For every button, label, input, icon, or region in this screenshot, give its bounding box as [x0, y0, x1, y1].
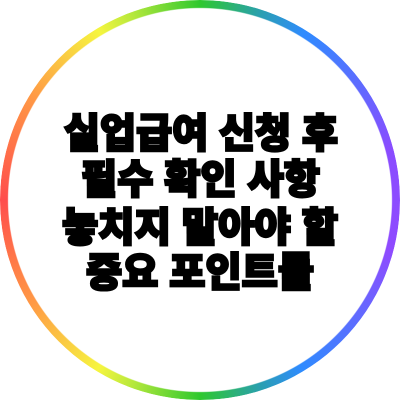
title line 1: 실업급여 신청 후: [64, 112, 338, 156]
title line 4: 중요 포인트들: [86, 251, 314, 295]
title line 2: 필수 확인 사항: [81, 158, 320, 202]
title line 3: 놓치지 말아야 할: [62, 206, 338, 250]
